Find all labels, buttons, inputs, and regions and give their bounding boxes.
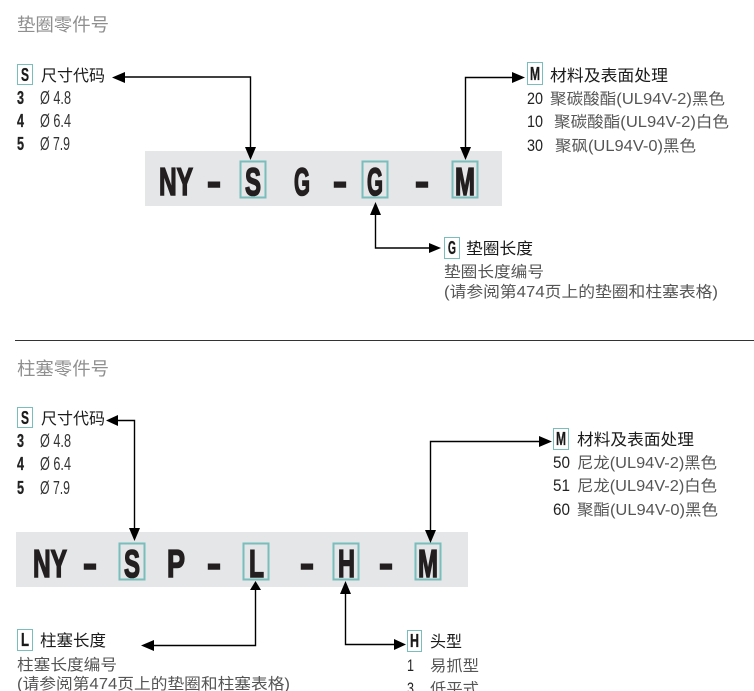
legend: size code: Ø 6.4 xyxy=(40,454,71,474)
part number bar: plunger: - xyxy=(379,543,393,586)
legend: head type: H xyxy=(410,631,419,651)
part number bar: washer: G xyxy=(367,161,383,204)
part number bar: plunger: S xyxy=(124,543,140,586)
legend: head type: 头型 xyxy=(430,633,462,651)
title: washer part number: 垫圈零件号 xyxy=(17,15,109,35)
arrow: H to head type xyxy=(340,581,406,650)
arrow: material to M xyxy=(460,72,525,160)
legend: size code xyxy=(17,408,105,498)
legend: size code: Ø 7.9 xyxy=(40,134,70,154)
arrow: L to plunger length xyxy=(141,581,261,651)
legend: material and finish: 聚砜(UL94V-0)黑色 xyxy=(555,137,696,155)
legend: plunger length: 柱塞长度 xyxy=(40,632,106,650)
legend: head type: 1 xyxy=(407,656,414,675)
legend: washer length: 垫圈长度编号 xyxy=(444,263,544,281)
section: washer part number xyxy=(17,15,729,301)
legend: material and finish: 60 xyxy=(553,500,570,519)
arrow: size code to S xyxy=(106,415,140,541)
part number bar: washer: NY xyxy=(159,161,193,204)
legend: material and finish: 聚酯(UL94V-0)黑色 xyxy=(577,501,718,519)
legend: material and finish: 尼龙(UL94V-2)黑色 xyxy=(577,454,717,472)
section: plunger part number xyxy=(16,359,718,691)
legend: size code: 尺寸代码 xyxy=(41,67,105,85)
part number bar: washer: - xyxy=(415,161,429,204)
part number bar: plunger: NY xyxy=(33,543,67,586)
legend: washer length xyxy=(444,238,718,301)
legend: head type xyxy=(407,630,479,691)
legend: material and finish: 30 xyxy=(527,136,543,155)
legend: plunger length: L xyxy=(21,630,29,650)
legend: size code: 4 xyxy=(17,454,24,474)
legend: plunger length: 柱塞长度编号 xyxy=(17,656,117,674)
legend: plunger length xyxy=(17,630,290,691)
legend: washer length: (请参阅第474页上的垫圈和柱塞表格) xyxy=(444,283,718,301)
arrow: size code to S xyxy=(112,72,256,160)
legend: size code: Ø 4.8 xyxy=(40,431,71,451)
legend: size code: 3 xyxy=(17,431,24,451)
legend: material and finish: 51 xyxy=(553,476,570,495)
legend: size code: Ø 7.9 xyxy=(40,478,70,498)
part number bar: plunger: H xyxy=(338,543,355,586)
part number bar: plunger: - xyxy=(207,543,221,586)
legend: size code xyxy=(17,64,105,154)
legend: size code: 5 xyxy=(17,134,24,154)
legend: material and finish: 材料及表面处理 xyxy=(550,67,668,85)
legend: size code: S xyxy=(21,408,29,428)
legend: size code: Ø 6.4 xyxy=(40,111,71,131)
legend: size code: S xyxy=(21,65,29,85)
part number bar: washer: M xyxy=(455,161,475,204)
legend: material and finish: 50 xyxy=(553,453,570,472)
legend: material and finish: 尼龙(UL94V-2)白色 xyxy=(577,477,717,495)
arrow: G to washer length xyxy=(370,202,441,253)
part number bar: plunger xyxy=(16,532,468,587)
legend: size code: 5 xyxy=(17,478,24,498)
part number bar: washer: S xyxy=(245,161,261,204)
part number bar: washer: - xyxy=(207,161,221,204)
legend: head type: 易抓型 xyxy=(430,657,479,675)
part number bar: washer: G xyxy=(294,161,310,204)
part number bar: plunger: M xyxy=(418,543,438,586)
legend: size code: 3 xyxy=(17,88,24,108)
part number bar: plunger: P xyxy=(167,543,185,586)
legend: material and finish: M xyxy=(556,429,566,449)
legend: material and finish xyxy=(553,428,718,519)
legend: material and finish: M xyxy=(530,64,540,84)
arrow: material to M xyxy=(425,436,552,543)
legend: size code: 尺寸代码 xyxy=(41,410,105,428)
part number bar: plunger: - xyxy=(300,543,314,586)
legend: material and finish: 聚碳酸酯(UL94V-2)白色 xyxy=(554,113,729,131)
title: plunger part number: 柱塞零件号 xyxy=(17,359,109,379)
legend: washer length: 垫圈长度 xyxy=(466,240,533,258)
legend: material and finish: 20 xyxy=(527,89,543,108)
part number bar: washer: - xyxy=(333,161,347,204)
legend: size code: 4 xyxy=(17,111,24,131)
legend: material and finish: 聚碳酸酯(UL94V-2)黑色 xyxy=(550,90,725,108)
legend: material and finish: 10 xyxy=(527,112,543,131)
legend: material and finish: 材料及表面处理 xyxy=(577,431,694,449)
legend: washer length: G xyxy=(448,238,456,258)
part number bar: plunger: - xyxy=(83,543,97,586)
legend: size code: Ø 4.8 xyxy=(40,88,71,108)
legend: material and finish xyxy=(527,62,729,155)
part number bar: plunger: L xyxy=(249,543,264,586)
part number bar: washer xyxy=(145,151,502,206)
